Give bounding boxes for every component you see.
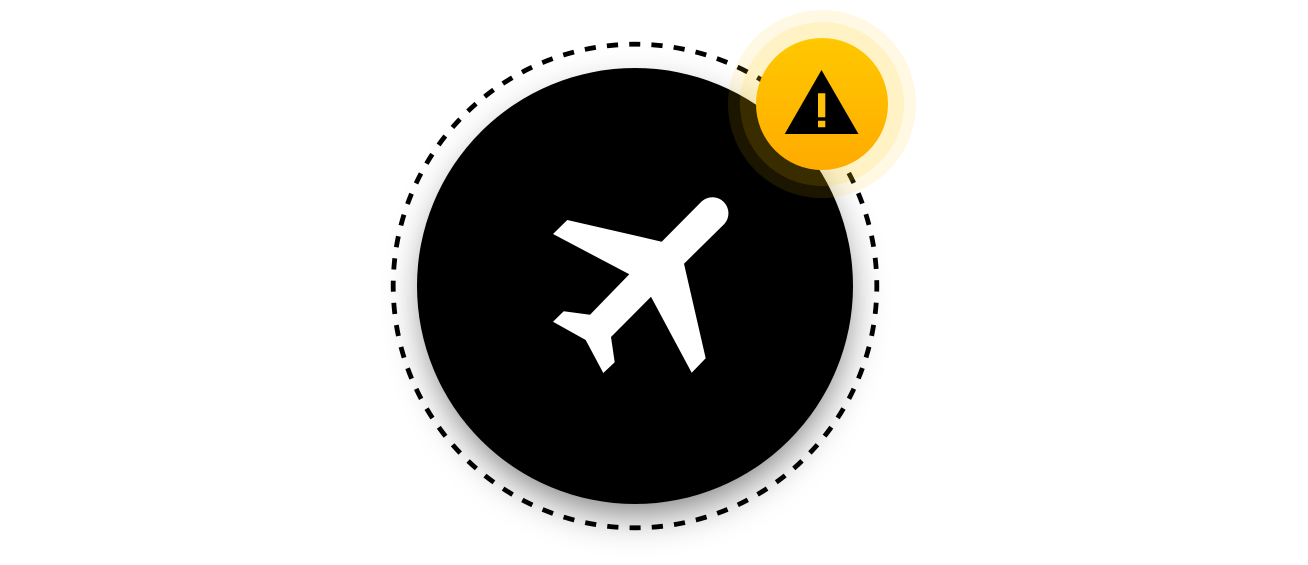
amber disc [756,38,888,170]
drop shadow of main circle [426,92,846,512]
inner halo [740,22,904,186]
icon: airplane [553,197,728,373]
outer halo [728,10,916,198]
dashed ring [393,44,877,528]
main black circle [417,68,853,504]
exclamation mark [818,93,825,127]
warning badge [728,10,916,198]
icon: warning triangle [785,70,858,134]
